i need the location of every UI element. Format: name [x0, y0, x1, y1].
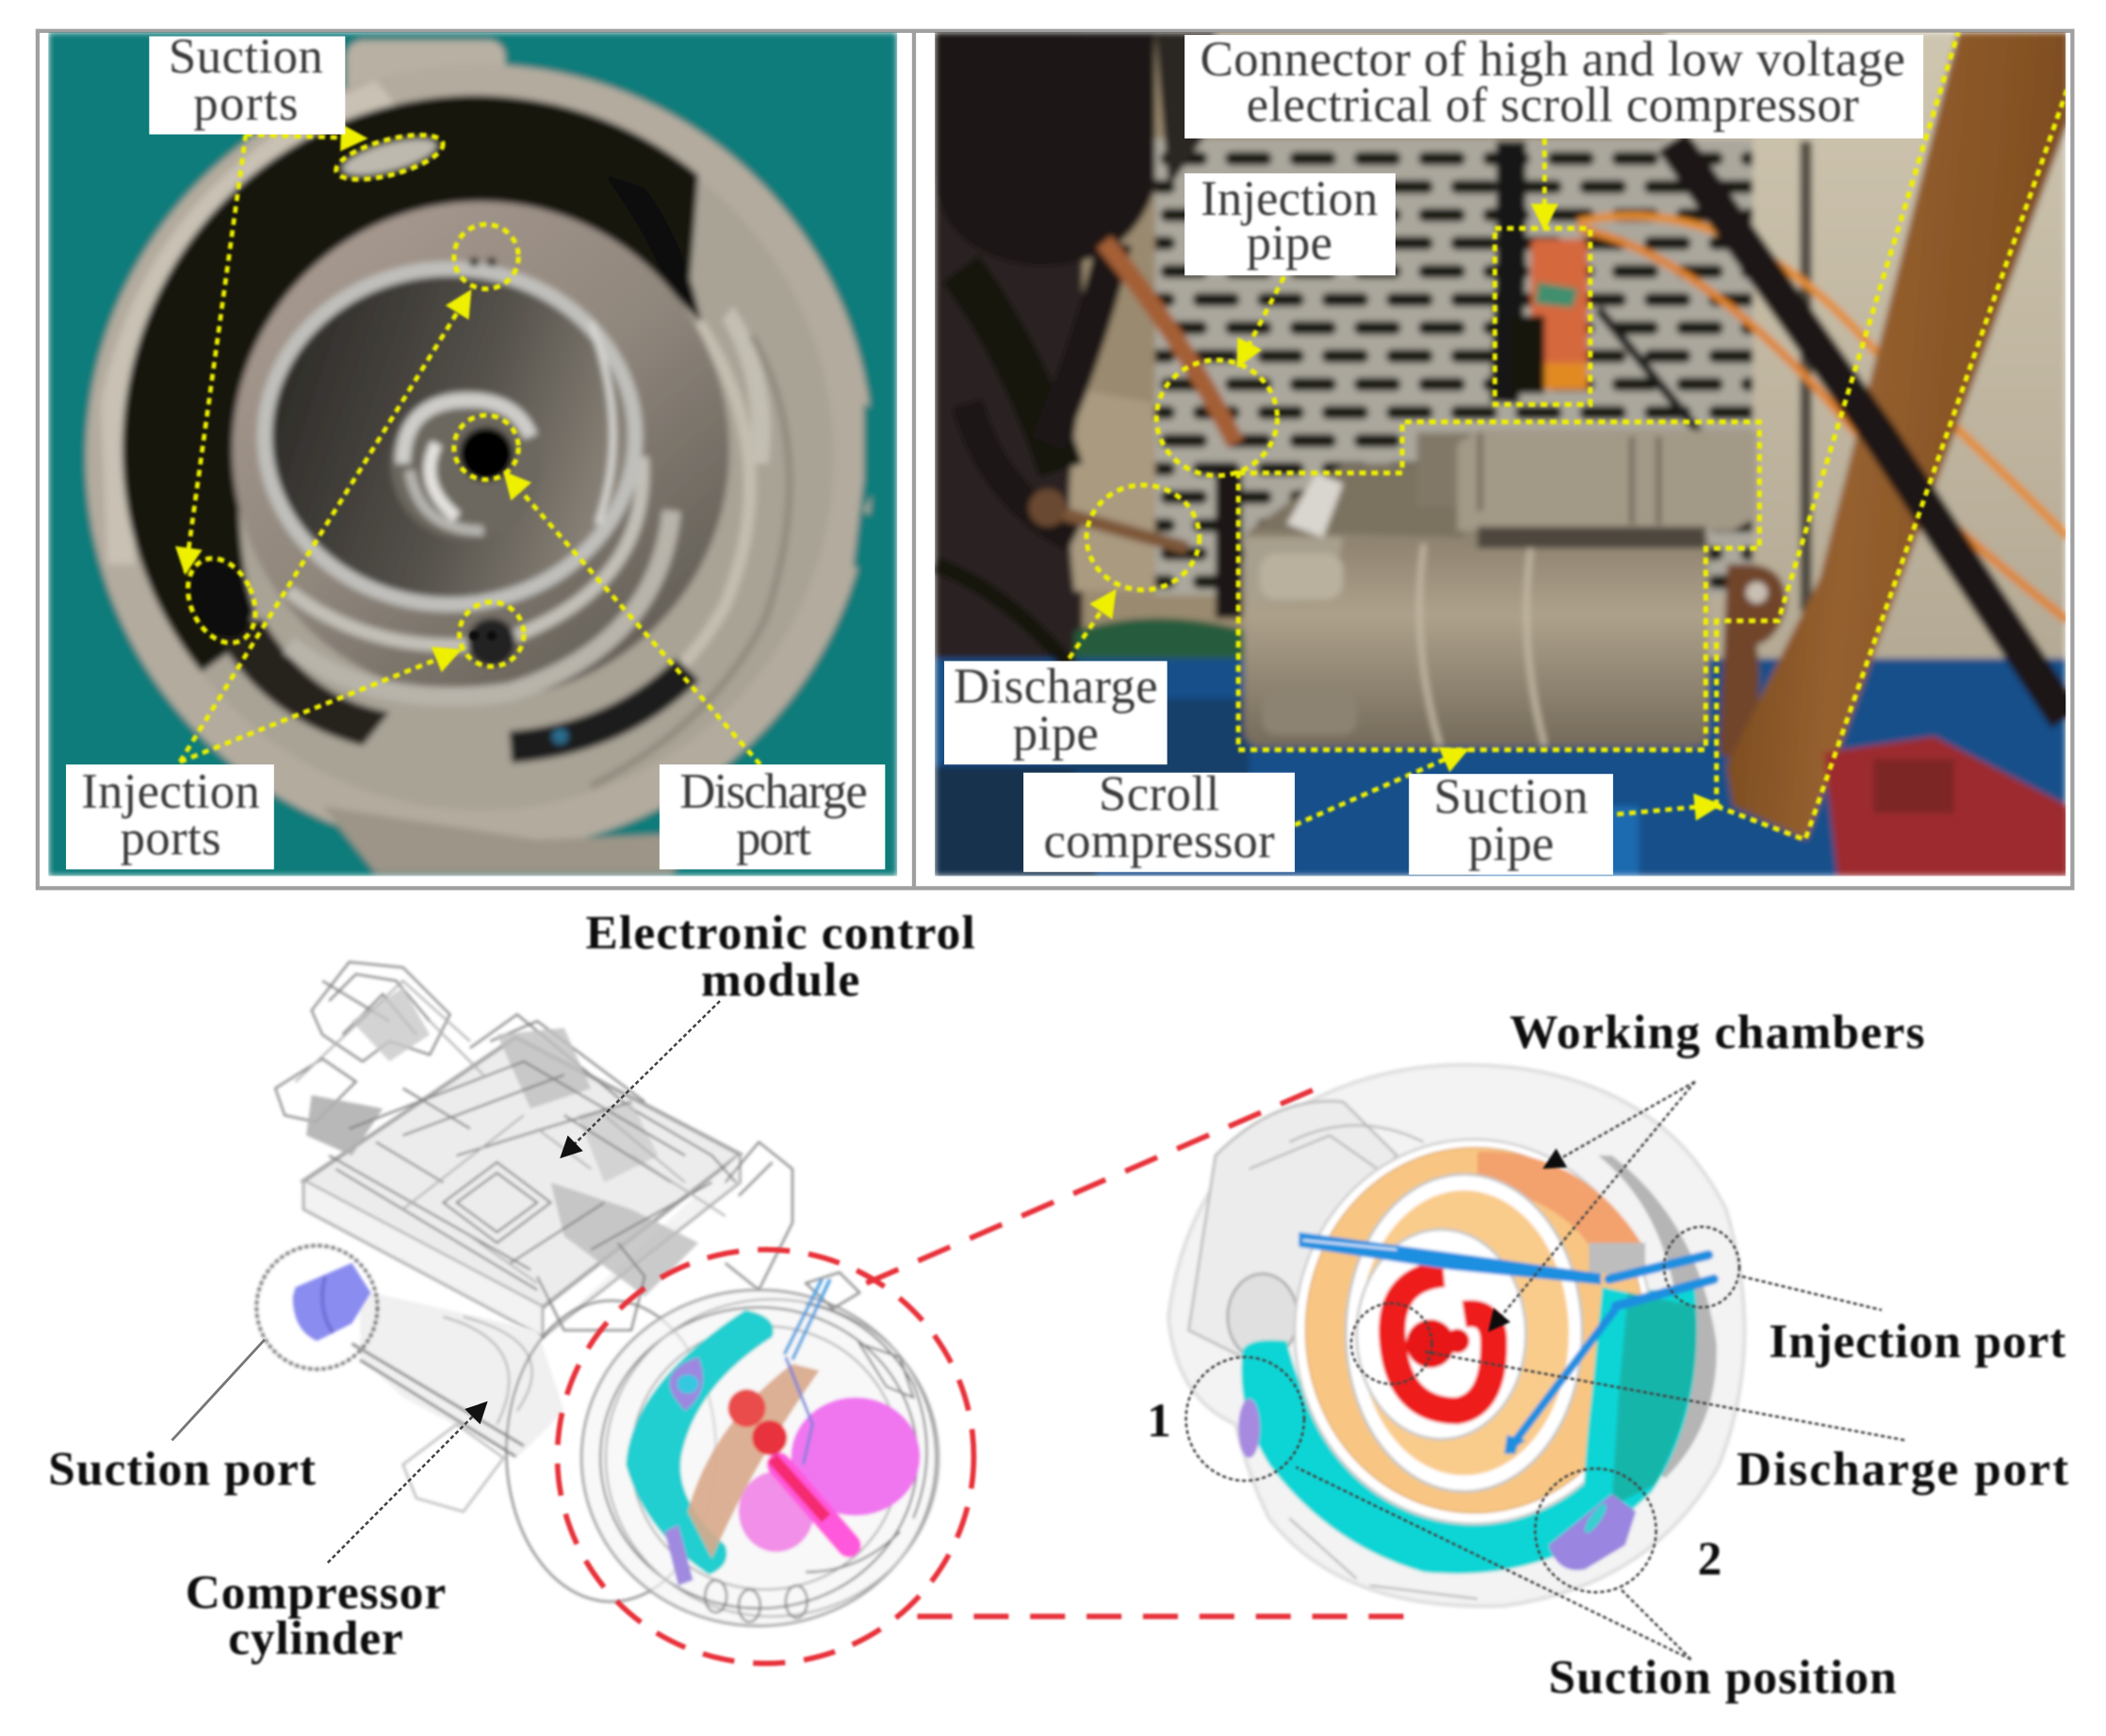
label: Suction port: Suction port	[48, 1442, 316, 1496]
label: Connector of high and low voltage electrical of scroll compressor: Connector of high and low voltage	[1200, 32, 1905, 87]
label: Injection pipe: Injection	[1200, 172, 1378, 226]
label: Discharge pipe: Discharge	[954, 660, 1158, 714]
arrow: compressor cylinder	[328, 1402, 486, 1563]
wireframe: electronic control module	[275, 962, 792, 1337]
label: Compressor: Compressor	[186, 1566, 446, 1620]
panel: scroll housing photo	[48, 29, 897, 876]
label: Suction position: Suction position	[1548, 1650, 1897, 1704]
label: Suction ports: ports	[193, 76, 298, 131]
zoom callout: red dashed circle and lead lines	[558, 1086, 1411, 1663]
label: 2: 2	[1698, 1532, 1722, 1586]
label: Suction ports: Suction	[169, 29, 323, 84]
label: Discharge port: Discharge	[679, 764, 868, 819]
diagram: compressor wireframe	[171, 962, 1906, 1663]
pointer: suction port	[171, 1339, 265, 1440]
panel: installed compressor photo	[935, 32, 2068, 876]
detail: colored internal parts	[581, 1272, 939, 1626]
label: Working chambers: Working chambers	[1510, 1006, 1925, 1059]
label: Connector of high and low voltage electrical of scroll compressor	[1184, 32, 1923, 139]
label: Injection ports	[66, 764, 274, 869]
label: Discharge pipe: pipe	[1013, 707, 1099, 762]
label: Electronic control module: Electronic control	[585, 907, 975, 960]
diagram: enlarged scroll section	[1168, 1065, 1744, 1606]
label: Discharge port: Discharge port	[1737, 1442, 2068, 1496]
callout rings: injection, discharge and suction positions	[1186, 1082, 1906, 1660]
label: Scroll compressor	[1023, 767, 1295, 872]
frame divider	[912, 31, 916, 888]
label: cylinder: cylinder	[228, 1612, 403, 1665]
label: Suction pipe	[1409, 770, 1613, 875]
label: Discharge pipe	[944, 660, 1167, 764]
label: Suction pipe: Suction	[1434, 770, 1589, 825]
label: Discharge port: port	[736, 811, 811, 866]
label: module: module	[701, 953, 859, 1007]
icon: suction port	[256, 1246, 378, 1369]
label: Discharge port	[660, 764, 885, 869]
label: Connector of high and low voltage electrical of scroll compressor: electrical of scroll compressor	[1247, 77, 1859, 132]
frame: photo panels	[38, 31, 2072, 888]
label: Injection ports: ports	[121, 811, 220, 866]
label: Suction ports	[149, 29, 345, 135]
label: Suction pipe: pipe	[1468, 816, 1554, 871]
label: 1: 1	[1147, 1394, 1171, 1448]
wireframe: compressor cylinder	[351, 1290, 716, 1601]
yellow annotations: suction and injection ports	[175, 126, 760, 764]
yellow annotations: compressor, pipes and connector	[1069, 32, 2068, 840]
labels: diagram text	[48, 907, 2068, 1704]
photo: compressor test bench	[935, 32, 2068, 876]
photo: teal background and scroll housing	[48, 32, 897, 876]
label: Scroll compressor: compressor	[1044, 814, 1275, 869]
label: Injection pipe: pipe	[1247, 216, 1332, 270]
label: Scroll compressor: Scroll	[1099, 767, 1219, 822]
label: Injection port: Injection port	[1769, 1315, 2065, 1368]
arrow: electronic control module	[562, 1001, 720, 1157]
label: Injection pipe	[1184, 172, 1396, 275]
label: Injection ports: Injection	[81, 764, 260, 819]
